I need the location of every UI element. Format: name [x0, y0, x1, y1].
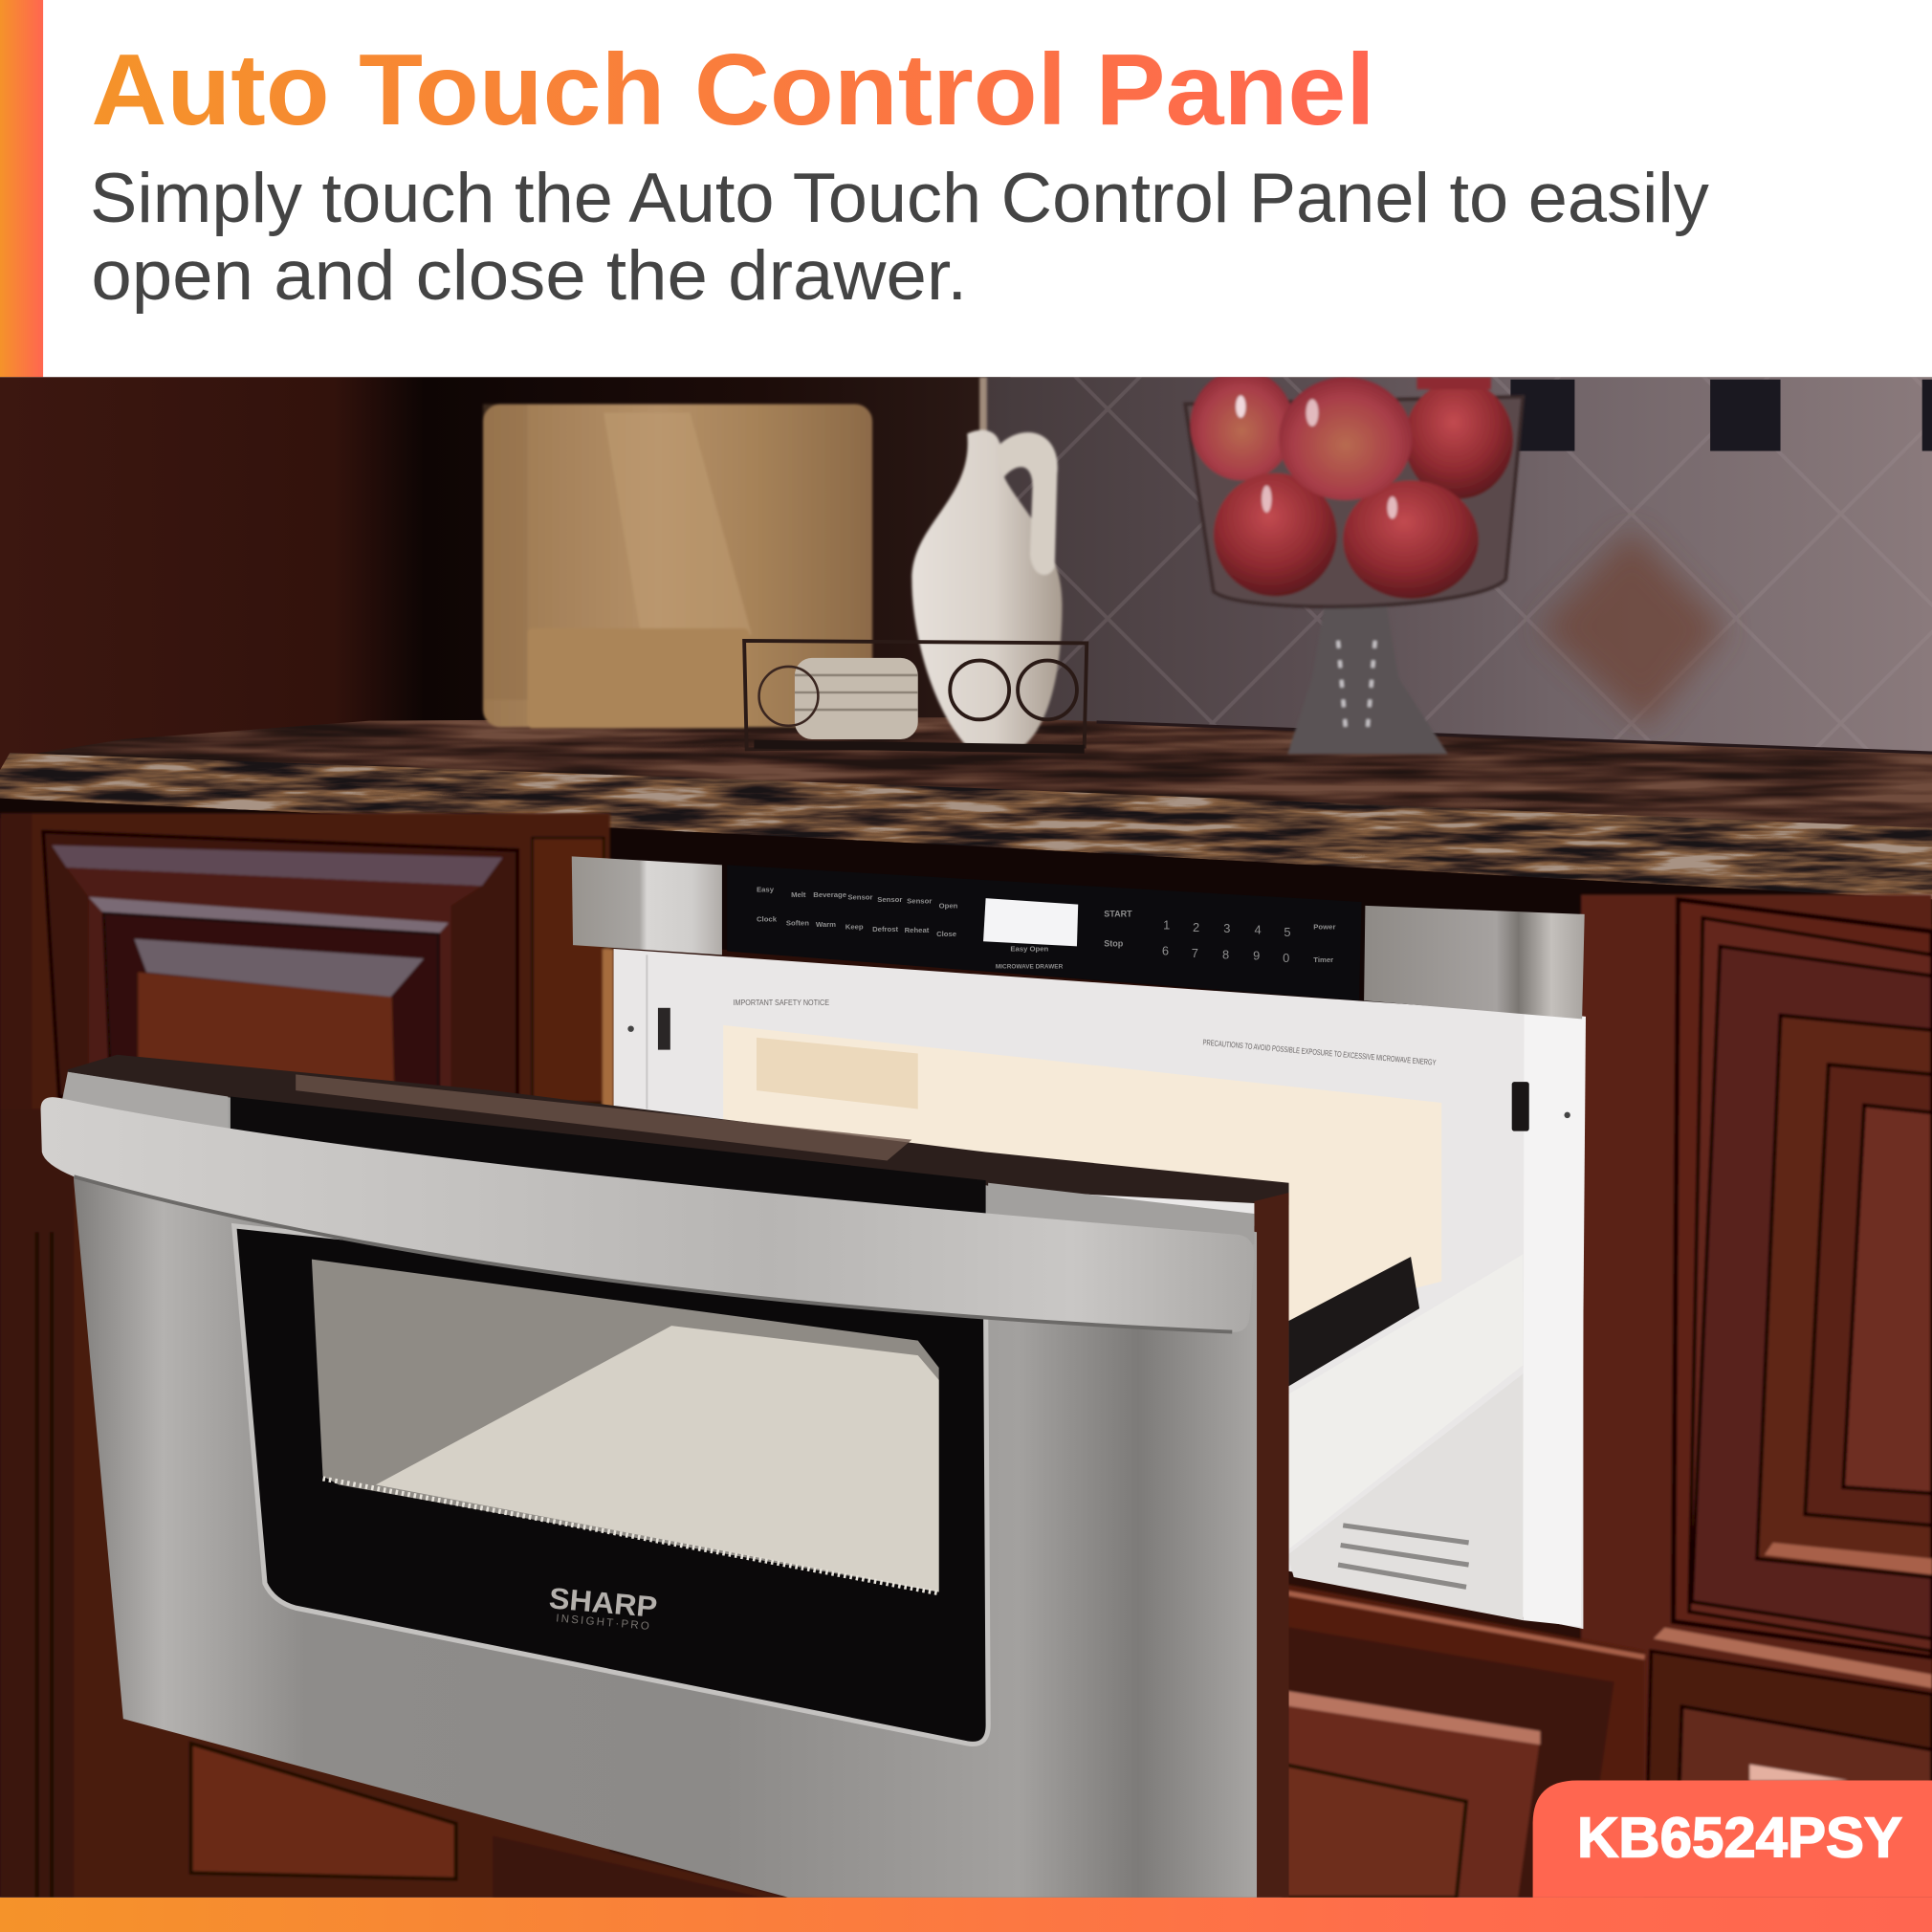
counter front edge [0, 753, 1932, 899]
right cabinet [1581, 894, 1932, 1898]
control button labels: Reheat [905, 926, 930, 934]
description text: open and close the drawer. [91, 236, 967, 315]
control button labels: Timer [1313, 955, 1333, 964]
tiled backsplash [986, 377, 1932, 759]
third molding [134, 939, 424, 997]
lower centre cabinet [1282, 1583, 1645, 1898]
control button labels: Warm [816, 920, 836, 929]
control button labels: Sensor [907, 896, 932, 905]
title: Auto Touch Control Panel [91, 33, 1375, 146]
warning label text: PRECAUTIONS TO AVOID POSSIBLE EXPOSURE TO EXCESSIVE MICROWAVE ENERGY [1202, 1037, 1437, 1067]
open microwave cabinet body [614, 949, 1586, 1629]
control panel strip [572, 856, 1585, 1019]
control button labels: Defrost [872, 925, 899, 933]
control button labels: Close [936, 930, 957, 938]
cabinet post [533, 838, 604, 1103]
control button labels [757, 886, 1335, 971]
number keypad: 6 [1162, 943, 1169, 957]
description text: Simply touch the Auto Touch Control Panel to easily [90, 159, 1709, 237]
oven cavity [723, 1025, 1441, 1321]
black touch panel [727, 865, 1362, 1000]
cavity mesh patch [757, 1038, 918, 1109]
Insight Pro text: INSIGHT·PRO [556, 1613, 649, 1633]
number keypad: 5 [1284, 925, 1291, 939]
control button labels: Easy [757, 886, 775, 894]
right door inner bevel [1757, 1016, 1932, 1577]
control button labels: Clock [757, 915, 778, 924]
control button labels: Keep [845, 922, 864, 931]
left gradient accent bar [0, 0, 43, 377]
control button labels: Open [939, 901, 958, 910]
control button labels: Melt [791, 890, 806, 899]
drawer slide rails [1287, 1254, 1523, 1620]
right door molding [1689, 918, 1932, 1651]
number keypad: 4 [1254, 923, 1262, 937]
control button labels: START [1104, 909, 1132, 918]
left corner trim [61, 1072, 228, 1133]
window mesh [312, 1260, 939, 1592]
handle shadow edge [74, 1176, 1232, 1332]
white header background [0, 0, 1932, 377]
handle bar [41, 1097, 1254, 1332]
cutting board [483, 405, 872, 728]
control button labels: Sensor [877, 895, 902, 904]
counter back edge line [1097, 722, 1932, 753]
left steel trim [572, 856, 722, 955]
top molding [52, 845, 503, 886]
model number text: KB6524PSY [1577, 1805, 1902, 1869]
control button labels: Stop [1104, 938, 1124, 948]
control button labels: Soften [786, 918, 809, 927]
number keypad: 0 [1283, 951, 1289, 965]
number keypad: 8 [1222, 947, 1229, 961]
light patch in window [376, 1326, 939, 1592]
warning label text: IMPORTANT SAFETY NOTICE [734, 998, 829, 1007]
steel insert [988, 1183, 1254, 1244]
number keypad: 1 [1163, 917, 1170, 932]
drawer top edge [68, 1055, 1289, 1205]
shadow under counter [0, 799, 1932, 1022]
warning label text [734, 998, 1437, 1067]
microwave drawer [41, 1055, 1289, 1898]
door lower panel [136, 971, 396, 1081]
control button labels: Sensor [847, 892, 872, 901]
right door raised frame [1692, 946, 1932, 1638]
right steel trim [1364, 906, 1585, 1019]
SHARP logo text: SHARP [548, 1581, 659, 1624]
number keypad [1162, 917, 1291, 965]
model number badge [1533, 1781, 1932, 1898]
number keypad: 9 [1253, 949, 1260, 963]
stainless front panel [68, 1072, 1257, 1898]
scene base [0, 377, 1932, 1898]
control button labels: MICROWAVE DRAWER [996, 964, 1064, 971]
door outer frame [43, 832, 517, 1097]
number keypad: 3 [1223, 921, 1230, 935]
drawer side [1254, 1193, 1289, 1898]
white LCD display [983, 898, 1078, 946]
glass fruit bowl with apples [1185, 369, 1523, 754]
counter surface [10, 717, 1932, 838]
number keypad: 2 [1193, 920, 1199, 934]
control button labels: Easy Open [1010, 945, 1049, 954]
right door centre panel [1843, 1106, 1932, 1493]
left cabinet [0, 813, 788, 1903]
second molding [89, 897, 449, 934]
control button labels: Beverage [813, 890, 847, 899]
wire rack with plates [744, 641, 1087, 749]
back wall and upper cabinet [0, 377, 1010, 771]
mesh dotted edge [323, 1479, 939, 1593]
window frame [234, 1226, 988, 1744]
black glass band [231, 1097, 986, 1222]
bottom gradient bar [0, 1898, 1932, 1932]
white ceramic vase [911, 377, 1062, 747]
kitchen scene photo illustration [0, 369, 1932, 1903]
right door outer frame [1673, 899, 1932, 1658]
control button labels: Power [1313, 922, 1335, 931]
number keypad: 7 [1192, 946, 1198, 960]
